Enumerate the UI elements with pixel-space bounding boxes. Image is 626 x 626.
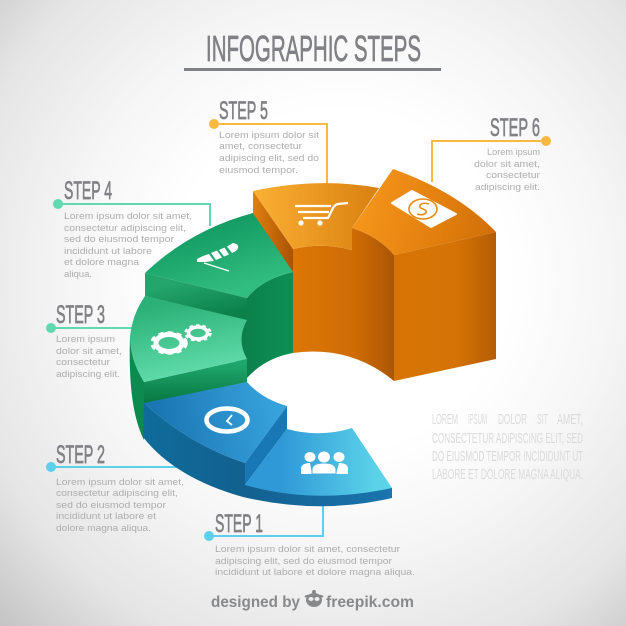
step 3: adipiscing elit.	[56, 369, 120, 380]
step 2: incididunt ut labore et	[56, 511, 156, 522]
segment: step 6 orange	[293, 169, 496, 381]
step 3: STEP 3	[56, 301, 105, 329]
side paragraph: DOLOR	[498, 411, 527, 428]
step 4: STEP 4	[64, 177, 112, 205]
segment: step 2 blue	[143, 382, 392, 506]
footer: designed by freepik	[211, 590, 414, 611]
icon: gears	[152, 326, 210, 353]
title: INFOGRAPHIC STEPS	[206, 28, 421, 69]
icon: shopping cart	[295, 203, 348, 226]
step 4: consectetur adipiscing elit,	[64, 223, 186, 234]
step 6: Lorem ipsum	[487, 147, 540, 158]
icon: dollar bill	[392, 191, 456, 227]
footer: designed by freepik: freepik.com	[326, 594, 414, 611]
step 6	[474, 114, 540, 193]
step 1: incididunt ut labore et dolore magna aliqua.	[215, 567, 415, 578]
side paragraph: AMET,	[557, 411, 583, 428]
side paragraph: IPSUM	[468, 411, 487, 428]
icon: people	[301, 451, 348, 474]
step 4: aliqua.	[64, 269, 92, 280]
step 2: Lorem ipsum dolor sit amet,	[56, 477, 184, 488]
side paragraph	[432, 411, 583, 483]
step 1: STEP 1	[215, 510, 263, 538]
step 2: consectetur adipiscing elit,	[56, 488, 178, 499]
step 5: amet, consectetur	[219, 141, 302, 152]
step 2: sed do eiusmod tempor	[56, 500, 166, 511]
step 3: consectetur	[56, 357, 110, 368]
step 6: consectetur	[486, 170, 540, 181]
step 1: adipiscing elit, sed do eiusmod tempor	[215, 556, 392, 567]
step 3: dolor sit amet,	[56, 346, 122, 357]
step 2: STEP 2	[56, 441, 105, 469]
step 4: Lorem ipsum dolor sit amet,	[64, 211, 192, 222]
step 4	[64, 177, 192, 280]
title	[184, 28, 441, 71]
connector lines	[46, 119, 551, 541]
step 5: adipiscing elit, sed do	[219, 153, 319, 164]
step 2: dolore magna aliqua.	[56, 523, 151, 534]
side paragraph: SIT	[537, 411, 548, 428]
step 1: Lorem ipsum dolor sit amet, consectetur	[215, 544, 400, 555]
step 1	[215, 510, 415, 578]
icon: clock	[206, 408, 248, 432]
3D donut chart	[130, 169, 496, 506]
step 5: eiusmod tempor.	[219, 165, 298, 176]
step 4: incididunt ut labore	[64, 246, 152, 257]
segment: step 3 green	[130, 296, 247, 440]
segment: step 1 blue	[245, 428, 392, 496]
step 3	[56, 301, 122, 380]
step 6: STEP 6	[490, 114, 540, 142]
step 3: Lorem ipsum	[56, 334, 115, 345]
step 4: et dolore magna	[64, 257, 140, 268]
segment: step 4 green	[145, 213, 293, 378]
icon: pencil	[197, 243, 238, 271]
segment: step 5 orange	[253, 183, 379, 274]
step 6: dolor sit amet,	[474, 159, 540, 170]
step 5	[219, 97, 319, 176]
step 5: Lorem ipsum dolor sit	[219, 130, 319, 141]
footer: designed by freepik: designed by	[211, 594, 300, 611]
step 4: sed do eiusmod tempor	[64, 234, 174, 245]
side paragraph: LOREM	[432, 411, 458, 428]
step 6: adipiscing elit.	[475, 182, 540, 193]
step 5: STEP 5	[219, 97, 268, 125]
step 2	[56, 441, 184, 534]
